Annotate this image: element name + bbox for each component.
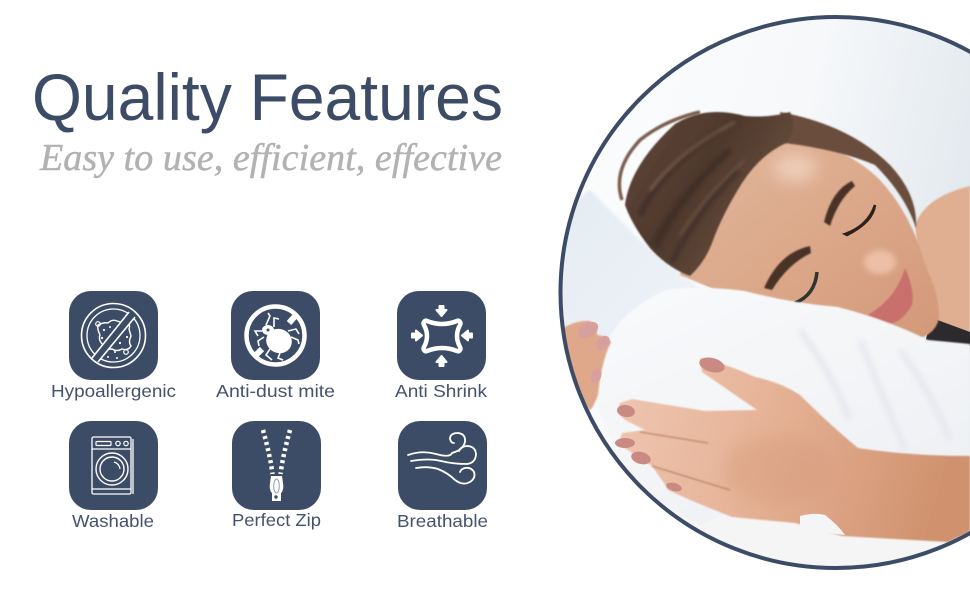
icon: perfect zip — [232, 421, 321, 510]
bed surface — [792, 529, 948, 566]
face — [680, 130, 939, 340]
icon: hypoallergenic — [69, 291, 158, 380]
pillow wrinkles — [800, 332, 921, 414]
icon: anti-dust mite — [231, 291, 320, 380]
left hand nails — [578, 322, 610, 384]
lips — [868, 268, 913, 323]
main pillow — [598, 287, 970, 456]
nose highlight — [864, 250, 896, 274]
label: washable: Washable — [72, 511, 154, 531]
photo circle border — [560, 17, 970, 568]
forehead highlight — [773, 154, 817, 182]
photo background — [761, 19, 970, 520]
icon: anti shrink — [397, 291, 486, 380]
label: anti shrink: Anti Shrink — [395, 381, 487, 401]
title: Quality Features — [32, 60, 503, 134]
pillow corner — [800, 514, 845, 535]
eyelashes upper — [845, 205, 875, 235]
hair right strand — [780, 112, 916, 228]
eyebrow lower — [764, 246, 811, 290]
left hand fingers — [560, 321, 611, 410]
icon: washable — [69, 421, 158, 510]
subtitle: Easy to use, efficient, effective — [39, 137, 502, 179]
back pillow — [562, 190, 694, 338]
label: hypoallergenic: Hypoallergenic — [51, 381, 176, 401]
photo: woman sleeping on pillow — [555, 14, 970, 580]
eyelashes lower — [795, 272, 817, 303]
hair strands — [640, 122, 745, 262]
dark gap below chin — [925, 318, 970, 346]
right arm and hand — [617, 358, 970, 542]
label: anti-dust mite: Anti-dust mite — [216, 381, 335, 401]
shoulder — [915, 186, 970, 345]
hand shadow — [727, 439, 800, 499]
eyebrow upper — [824, 181, 855, 226]
hair outer strand — [619, 112, 700, 200]
hair main — [625, 112, 793, 276]
label: perfect zip: Perfect Zip — [232, 510, 321, 530]
icon: breathable — [398, 421, 487, 510]
finger creases — [640, 432, 730, 490]
label: breathable: Breathable — [397, 511, 488, 531]
right hand nails — [615, 355, 726, 493]
